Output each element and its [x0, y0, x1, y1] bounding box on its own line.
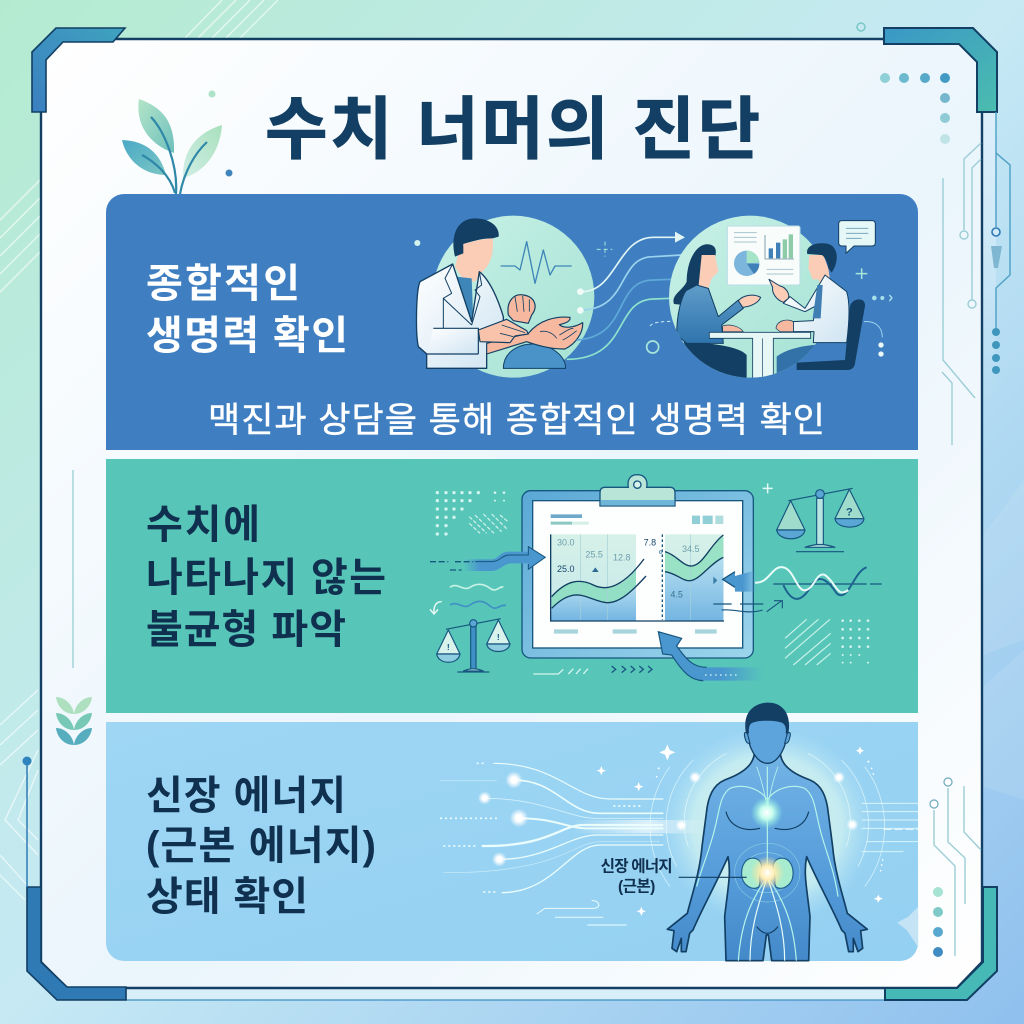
heading: panel 3: 상태 확인: [146, 875, 308, 919]
panel: pulse and consultation: [106, 194, 918, 450]
chair: [797, 299, 865, 370]
callout: kidney energy: [601, 858, 747, 896]
patient arm and hand: [487, 317, 583, 354]
man: [769, 243, 849, 380]
energy lines: [440, 753, 918, 925]
arrows: flowing lines: [567, 232, 685, 359]
glow nodes: [478, 771, 858, 867]
heading: panel 2: 나타나지 않는: [146, 556, 386, 600]
chart values: 34.5: [682, 544, 699, 554]
star notch: [897, 907, 918, 947]
frame corner: bottom right: [885, 887, 997, 1000]
callout: kidney energy: (근본): [618, 878, 655, 896]
icon: scale top right: ?: [846, 506, 853, 518]
energy channels: [697, 767, 838, 961]
human figure: [667, 703, 867, 961]
icon: small leaf column: [56, 697, 92, 745]
table: [709, 332, 811, 380]
doctor hand: [478, 319, 528, 343]
scene: doctor taking pulse: [414, 216, 594, 378]
heading: panel 2: 수치에: [146, 503, 260, 547]
illustration: clipboard chart: [430, 475, 882, 681]
frame corner: bottom left: [27, 887, 126, 1000]
sparkles: [597, 744, 883, 916]
icon: scale top right: [777, 488, 864, 552]
chart values: 25.0: [557, 564, 574, 574]
woman: [673, 244, 761, 380]
halo: [661, 727, 874, 927]
frame corner: top right: [884, 28, 997, 112]
arrow: left: [430, 546, 545, 571]
arrow: bottom: [658, 632, 763, 681]
chart board: [727, 226, 800, 285]
illustration: doctor, arrows and consultation: [414, 216, 892, 380]
scene: consultation: [669, 216, 892, 380]
dots: top right: [880, 73, 950, 144]
kidneys: [742, 858, 793, 888]
icon: scale bottom left: !: [447, 642, 450, 652]
line chart: [551, 534, 724, 621]
chart values: 25.5: [585, 550, 603, 560]
clipboard: [522, 475, 753, 658]
illustration: body with energy lines: [440, 703, 918, 961]
speech bubble: [839, 221, 875, 253]
panel: kidney energy: [106, 703, 918, 961]
chart values: 7.8: [644, 538, 656, 548]
icon: plant sprout: [122, 90, 232, 194]
heading: panel 1: 생명력 확인: [146, 314, 348, 358]
arrow: right: [713, 567, 882, 612]
heading: panel 1: 종합적인: [146, 262, 300, 306]
caption: panel 1: 맥진과 상담을 통해 종합적인 생명력 확인: [208, 401, 825, 440]
chart values: 12.8: [613, 552, 630, 562]
heading: panel 3: 신장 에너지: [146, 774, 346, 818]
frame corner: top left: [32, 28, 125, 112]
dots: right outer: [992, 328, 1000, 374]
title: 수치 너머의 진단: [265, 92, 760, 168]
chart values: 30.0: [557, 538, 574, 548]
callout: kidney energy: 신장 에너지: [601, 858, 673, 876]
icon: scale bottom left: !: [497, 632, 500, 642]
heading: panel 3: (근본 에너지): [146, 824, 376, 868]
raised fist: [508, 295, 535, 323]
decorative dots and hatches: [430, 483, 869, 674]
dots: bottom right: [933, 887, 943, 957]
panel: chart and imbalance: [106, 459, 918, 713]
heading: panel 2: 불균형 파악: [146, 608, 346, 652]
icon: scale bottom left: [437, 619, 510, 672]
chart values: 4.5: [670, 589, 683, 599]
chart values: [557, 538, 699, 599]
